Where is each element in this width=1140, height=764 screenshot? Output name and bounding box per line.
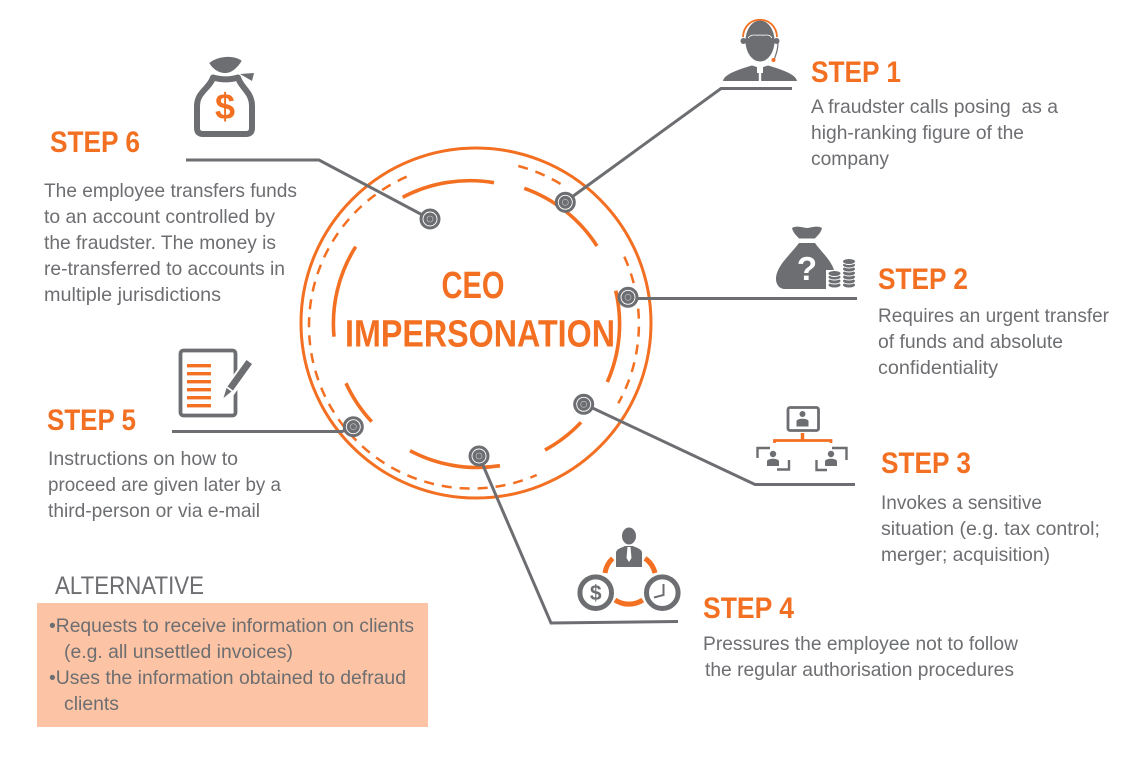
step 1 text: company	[811, 148, 889, 170]
panel: alternative: clients	[64, 693, 119, 715]
title: IMPERSONATION	[345, 314, 615, 356]
icon: executive with money and clock	[580, 528, 678, 608]
connector nodes	[343, 192, 638, 466]
step 4 text	[703, 592, 1019, 681]
step 6 text: the fraudster. The money is	[44, 232, 276, 254]
step 6 text: re-transferred to accounts in	[44, 258, 285, 280]
title: CEO	[442, 265, 504, 307]
step 4 text: the regular authorisation procedures	[705, 659, 1014, 681]
step 6 text: STEP 6	[50, 126, 140, 159]
step 4 text: STEP 4	[703, 592, 794, 625]
step 6 text: multiple jurisdictions	[44, 284, 221, 306]
icon: money bag with dollar	[197, 57, 254, 134]
step 5 text: STEP 5	[47, 404, 136, 437]
step 3 text: merger; acquisition)	[881, 544, 1050, 566]
icon: money bag with question mark and coins: ?	[797, 250, 817, 287]
step 5 text: Instructions on how to	[48, 448, 238, 470]
title	[345, 265, 615, 356]
step 4 text: Pressures the employee not to follow	[703, 633, 1019, 655]
step 1 text: A fraudster calls posing as a	[811, 96, 1058, 118]
connector lines	[172, 88, 857, 623]
icon: organisation chart	[758, 408, 846, 470]
alternative heading: ALTERNATIVE	[55, 572, 204, 600]
step 1 text: high-ranking figure of the	[811, 122, 1024, 144]
step 5 text	[47, 404, 281, 522]
step 5 text: proceed are given later by a	[48, 474, 281, 496]
step 3 text: STEP 3	[881, 447, 971, 480]
panel: alternative: •Requests to receive information on clients	[49, 615, 414, 637]
step 5 text: third-person or via e-mail	[48, 500, 260, 522]
step 2 text: STEP 2	[878, 263, 968, 296]
step 2 text: confidentiality	[878, 357, 998, 379]
step 3 text	[881, 447, 1100, 566]
step 2 text: Requires an urgent transfer	[878, 305, 1109, 327]
panel: alternative: (e.g. all unsettled invoices)	[64, 641, 293, 663]
icon: call agent with headset	[723, 20, 797, 81]
icon: executive with money and clock: $	[590, 582, 602, 605]
step 2 text: of funds and absolute	[878, 331, 1063, 353]
step 2 text	[878, 263, 1109, 379]
panel: alternative	[37, 603, 428, 727]
icon: money bag with dollar: $	[215, 86, 235, 127]
step 3 text: situation (e.g. tax control;	[881, 518, 1100, 540]
icon: document and pencil	[180, 350, 252, 416]
icon: money bag with question mark and coins	[776, 227, 856, 289]
step 6 text: to an account controlled by	[44, 206, 275, 228]
panel: alternative: •Uses the information obtained to defraud	[49, 667, 406, 689]
step 6 text: The employee transfers funds	[44, 180, 297, 202]
central circle diagram	[301, 148, 651, 498]
step 1 text	[811, 56, 1058, 170]
step 6 text	[44, 126, 297, 306]
step 1 text: STEP 1	[811, 56, 901, 89]
step 3 text: Invokes a sensitive	[881, 492, 1042, 514]
